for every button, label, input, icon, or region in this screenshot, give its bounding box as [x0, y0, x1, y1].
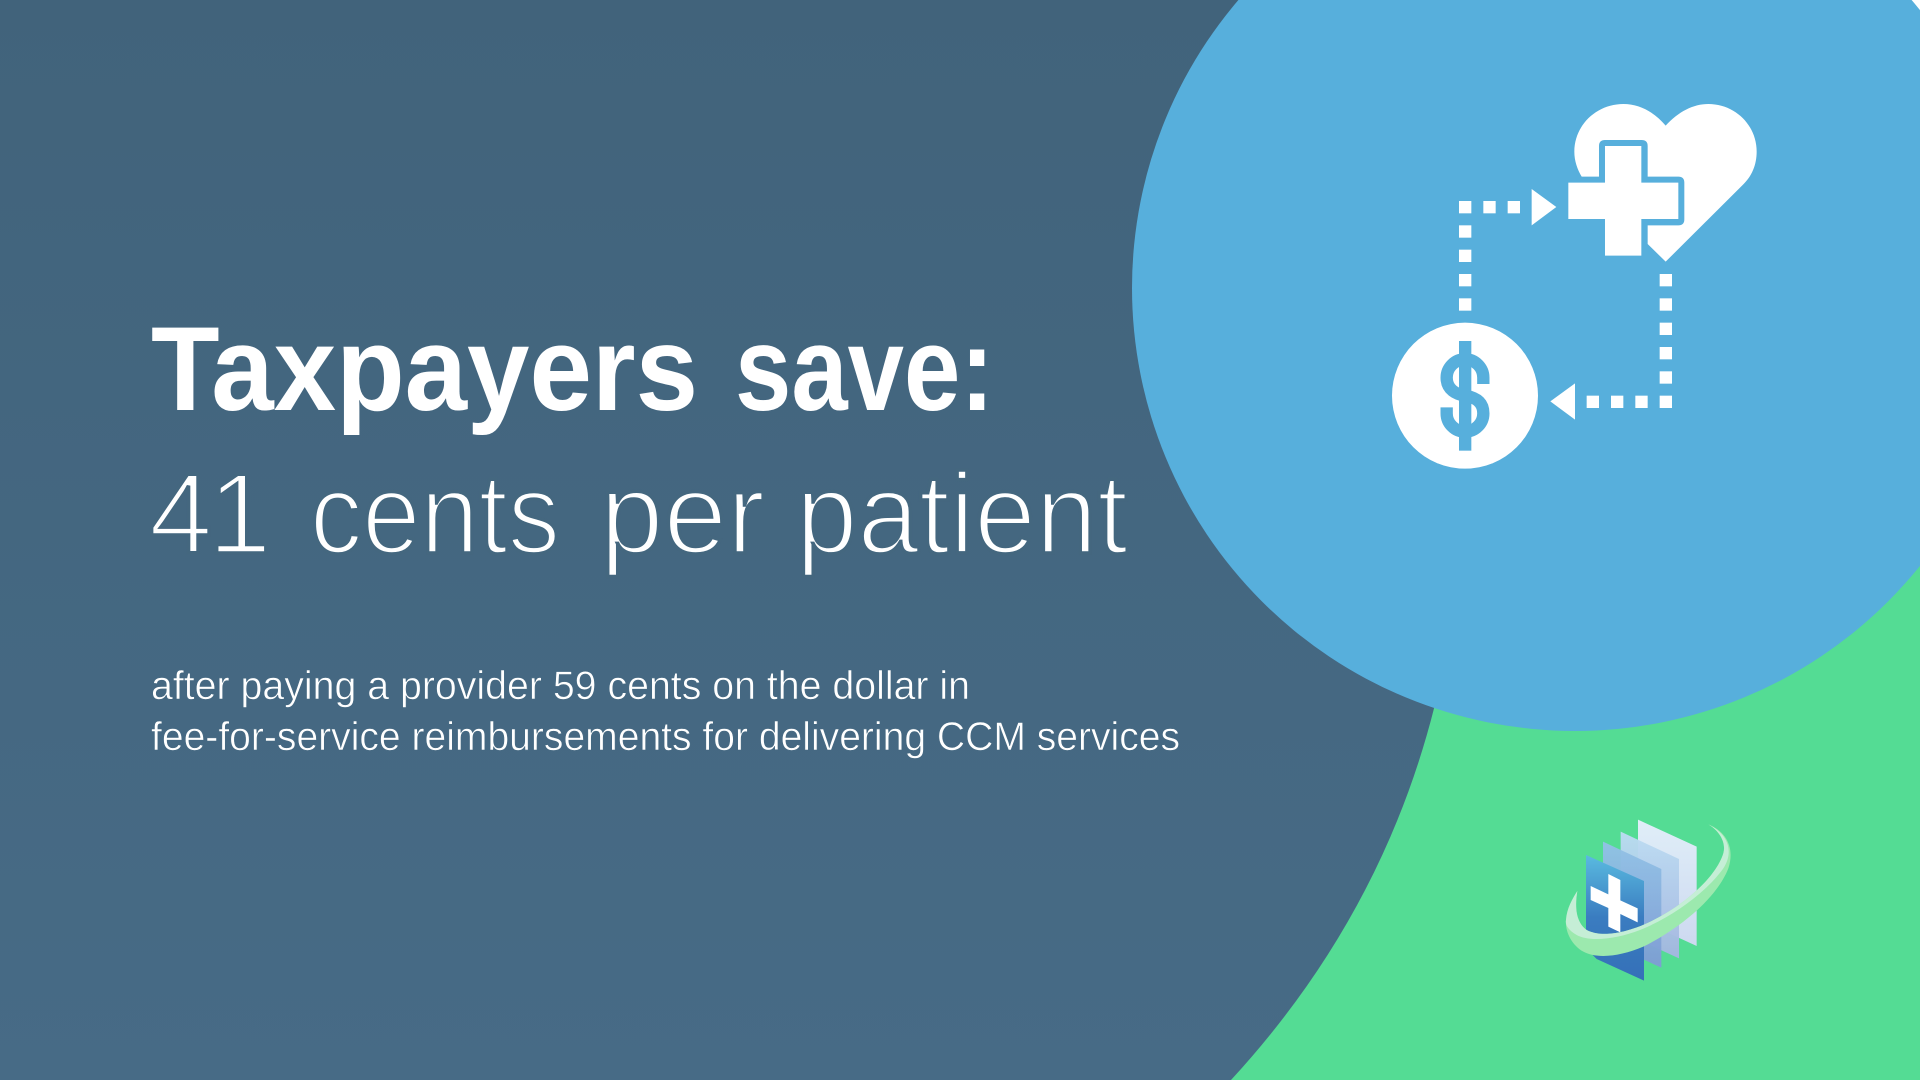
- headline: 41 cents per patient: [149, 451, 1128, 578]
- white page corner: [1905, 0, 1920, 15]
- headline: 41 cents per patient: 41: [149, 451, 271, 578]
- icon: money and health cycle: [1392, 104, 1757, 469]
- title: Taxpayers save: save:: [735, 302, 994, 436]
- body text: fee-for-service reimbursements for delivering CCM services: [151, 715, 1180, 759]
- icon: heart with cross: [1568, 104, 1757, 262]
- headline: 41 cents per patient: cents: [310, 451, 560, 578]
- arrow: dotted path from coin to heart: [1459, 189, 1556, 311]
- blue circle: [1132, 0, 1920, 731]
- logo cross: [1591, 874, 1638, 932]
- title: Taxpayers save: [151, 302, 994, 436]
- headline: 41 cents per patient: per: [600, 451, 765, 578]
- arrow: dotted path from heart to coin: [1550, 274, 1672, 420]
- icon: dollar coin: [1392, 323, 1538, 469]
- headline: 41 cents per patient: patient: [796, 451, 1128, 578]
- body text: [151, 664, 1180, 759]
- green corner shape: [1231, 400, 1920, 1080]
- icon: logo with shield layers and swoosh: [1566, 820, 1731, 981]
- body text: after paying a provider 59 cents on the dollar in: [151, 664, 970, 708]
- logo swoosh: [1566, 824, 1731, 956]
- title: Taxpayers save: Taxpayers: [151, 302, 698, 436]
